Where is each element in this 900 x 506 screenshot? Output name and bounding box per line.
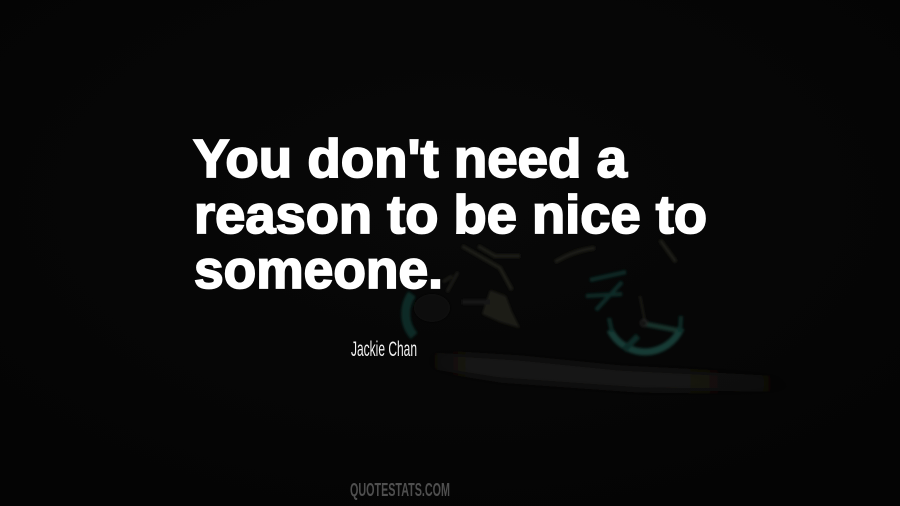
swingarm — [462, 300, 490, 304]
author name: Jackie Chan — [351, 338, 417, 361]
quote line 3: someone. — [194, 240, 443, 300]
site watermark: QUOTESTATS.COM — [350, 480, 450, 500]
frame and tail highlights — [462, 240, 676, 290]
rear sprocket — [414, 294, 450, 322]
front wheel — [609, 296, 681, 352]
lit floor — [425, 352, 800, 392]
quote line 2: reason to be nice to — [194, 185, 707, 245]
rear wheel — [406, 294, 414, 336]
quote text — [193, 129, 707, 300]
footpeg bracket — [482, 290, 520, 328]
fairing stripe — [586, 272, 626, 310]
quote line 1: You don't need a — [193, 129, 628, 189]
motorcycle — [406, 240, 681, 352]
